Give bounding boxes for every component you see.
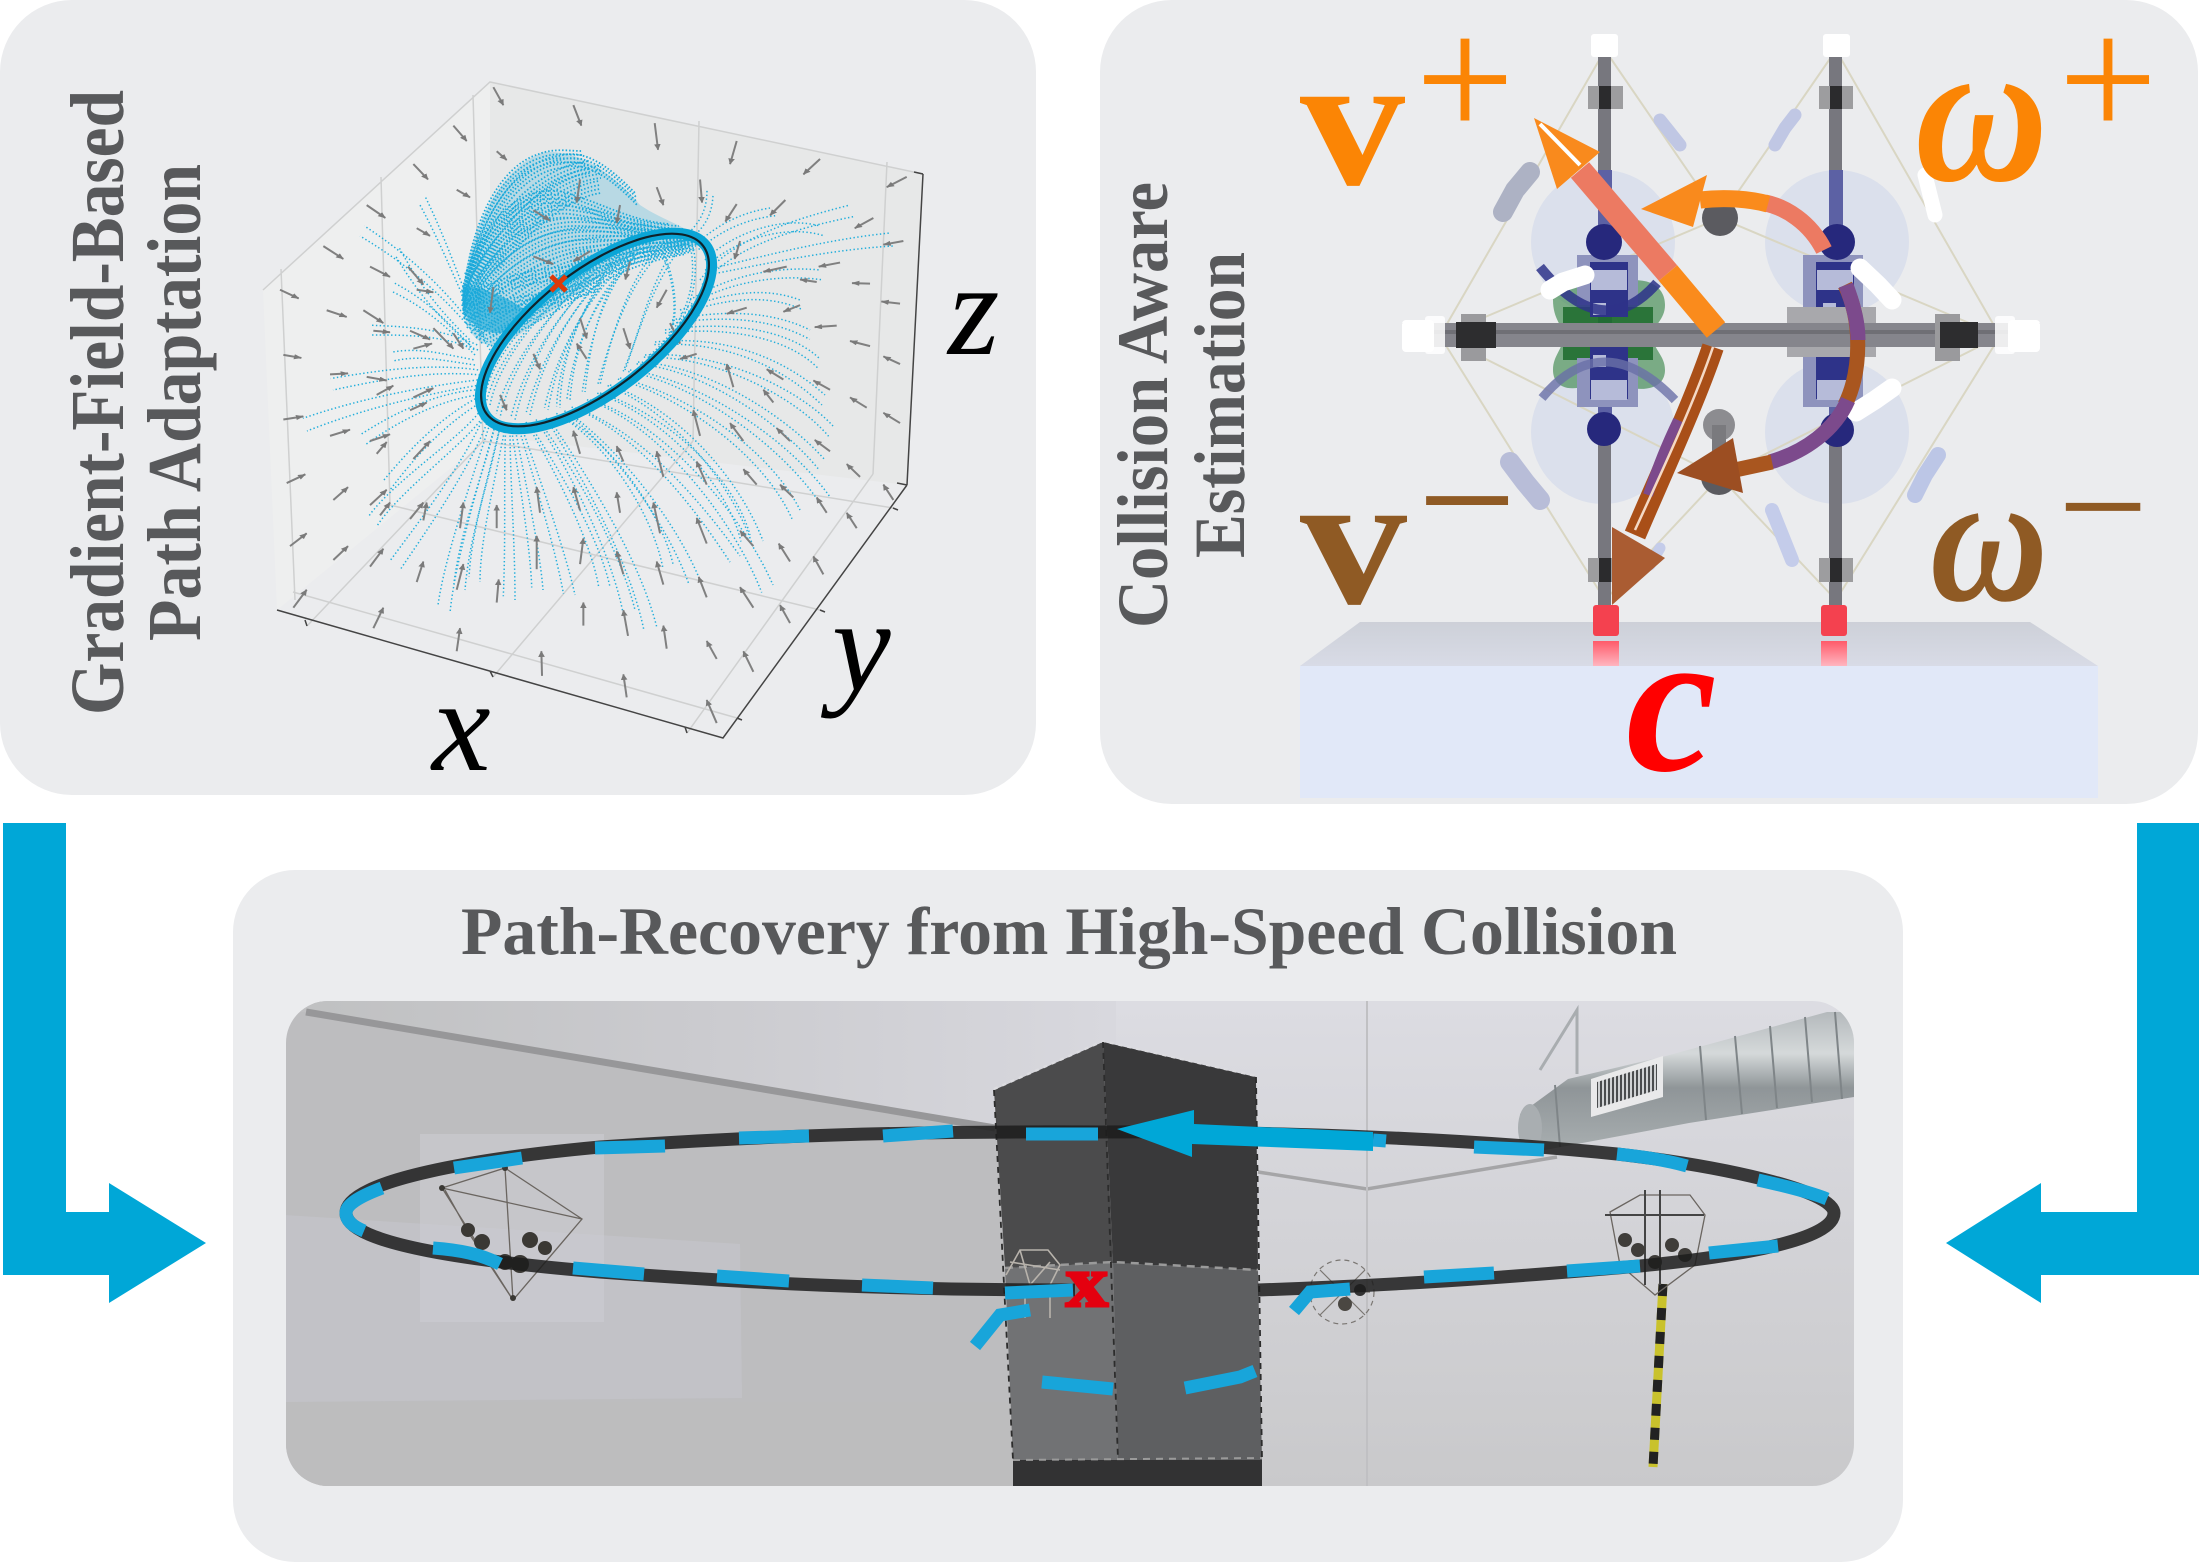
heading: collision aware estimation: Collision Aware [1103,182,1183,628]
duct [1518,1010,1854,1152]
label: omega plus: ω [1915,0,2048,225]
panel: collision aware estimation [1100,0,2198,815]
icon: red collision cross: x [1066,1242,1108,1322]
photo background walls [285,1001,1854,1486]
chart: dome trajectories [462,150,696,346]
robot: cage cables [1440,50,2000,600]
label: v minus: − [1417,403,1517,598]
chart: gray gradient quiver arrows [280,87,907,723]
arrow: direction of travel [1117,1110,1373,1157]
chart: reference ellipse path [450,198,742,464]
robot: frame rods [1588,34,1853,636]
axis labels x y z: z [946,236,999,383]
arrow: right blue connector [1946,823,2199,1303]
heading: gradient-field-based path adaptation [56,90,217,715]
arrow: translational velocity plus [1534,118,1716,330]
heading: gradient-field-based path adaptation: Gradient-Field-Based [56,90,140,715]
robot: cable hub wheels [1701,200,1738,495]
chart: 3D box axes and grid [263,82,923,738]
arrow: angular velocity plus [1641,175,1824,250]
chart: blue trajectory fan shading [462,152,705,346]
arrow: angular velocity minus [1677,285,1858,493]
axis labels x y z: y [820,572,891,719]
executed path dashes [346,1131,1827,1389]
icon: red collision cross on plot [551,276,566,291]
label: omega plus [1915,0,2158,225]
label: v plus: v [1300,16,1405,226]
robot: strut marker shapes [1503,115,1938,565]
robot: propeller discs [1531,170,1909,504]
drone: left [439,1165,582,1301]
heading: collision aware estimation: Estimation [1180,252,1260,558]
heading: path-recovery from high-speed collision: Path-Recovery from High-Speed Collision [461,893,1677,969]
axis labels x y z: x [430,652,491,799]
robot: electronics stacks [1540,255,1863,407]
heading: collision aware estimation [1103,182,1260,628]
label: omega minus [1930,417,2148,641]
arrow: translational velocity minus [1612,347,1713,605]
striped pole [1653,1284,1663,1467]
drone: right [1605,1190,1705,1295]
reference ring [346,1132,1834,1290]
photo: indoor flight test [285,1001,1854,1486]
contact block [1300,622,2098,798]
label: v minus [1300,403,1517,645]
drone: crashed at pillar [1006,1250,1060,1318]
label: omega minus: ω [1930,436,2048,641]
drone: middle [1310,1260,1374,1324]
chart: dotted spray trajectories [294,178,896,641]
heading: gradient-field-based path adaptation: Path Adaptation [133,164,217,641]
label: v minus: v [1300,435,1407,645]
axis labels x y z [430,236,999,799]
label: collision c: c [1626,588,1717,815]
robot: horizontal bar with end blocks [1402,307,2040,361]
chart: dense left mass of trajectories [463,285,527,333]
panel: path recovery [233,870,1903,1562]
arrow: left blue connector [3,823,206,1303]
panel: gradient-field path adaptation [0,0,1036,799]
pillar obstacle [994,1041,1262,1486]
robot: motors [1586,224,1855,447]
label: omega minus: − [2058,417,2148,595]
label: v plus [1300,0,1515,226]
